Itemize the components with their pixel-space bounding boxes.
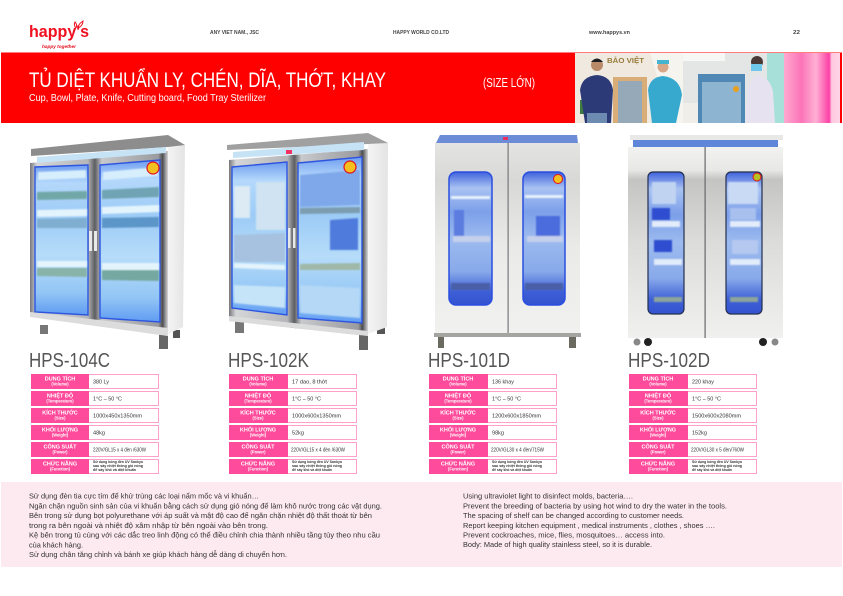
spec table: HPS-102K: (Temperature) xyxy=(244,398,272,404)
spec table: HPS-102D: (Size) xyxy=(653,416,664,420)
spec table: HPS-101D: 220V/GL30 x 4 đèn/715W xyxy=(491,448,544,454)
spec table: HPS-104C: (Temperature) xyxy=(46,398,74,404)
spec table: HPS-102D xyxy=(629,374,756,474)
spec table: HPS-102K: sau sấy nhiệt thông gió nóng xyxy=(292,464,342,468)
English description: Using ultraviolet light to disinfect molds, bacteria…. xyxy=(463,492,633,500)
spec table: HPS-102D: (Temperature) xyxy=(644,398,672,404)
Vietnamese description: trong ra bên ngoài và nhiệt độ xâm nhập từ bên ngoài vào bên trong. xyxy=(29,521,268,530)
spec table: HPS-102D: 152kg xyxy=(692,430,707,436)
spec table: HPS-102D: (Volume) xyxy=(649,382,667,386)
spec table: HPS-102D: sau sấy nhiệt thông gió nóng xyxy=(692,464,742,468)
spec table: HPS-102D: CHỨC NĂNG xyxy=(641,460,675,468)
spec table: HPS-102D: KHỐI LƯỢNG xyxy=(640,426,676,434)
spec table: HPS-102D: (Function) xyxy=(648,466,669,472)
panel: description xyxy=(1,482,842,567)
spec table: HPS-102K: 1000x600x1350mm xyxy=(292,414,341,420)
spec table: HPS-101D: (Function) xyxy=(448,466,469,472)
spec table: HPS-104C: CÔNG SUẤT xyxy=(44,442,77,450)
header: world company name: HAPPY WORLD CO.LTD xyxy=(393,30,449,36)
spec table: HPS-104C: NHIỆT ĐỘ xyxy=(47,392,74,400)
spec table: HPS-101D: 98kg xyxy=(492,430,504,436)
spec table: HPS-102D: KÍCH THƯỚC xyxy=(640,408,676,416)
English description: Body: Made of high quality stainless steel, so it is durable. xyxy=(463,540,652,549)
Vietnamese description: Bên trong sử dụng bọt polyurethane với áp suất và mật độ cao để ngăn chặn nhiệt độ thất thoát từ bên xyxy=(29,511,372,520)
spec table: HPS-101D: (Volume) xyxy=(449,382,467,386)
spec table: HPS-104C: KHỐI LƯỢNG xyxy=(42,426,78,434)
product: HPS-101D cabinet xyxy=(434,135,581,348)
banner subtitle: Cup, Bowl, Plate, Knife, Cutting board, Food Tray Sterilizer xyxy=(29,93,267,104)
spec table: HPS-102D: 220 khay xyxy=(692,380,714,386)
Vietnamese description xyxy=(29,492,382,559)
spec table: HPS-104C: sau sấy nhiệt thông gió nóng xyxy=(93,464,143,468)
spec table: HPS-104C: KÍCH THƯỚC xyxy=(42,408,78,416)
spec table: HPS-102K: Sử dụng bóng đèn UV Sankyo xyxy=(292,460,342,464)
spec table: HPS-101D: KHỐI LƯỢNG xyxy=(440,426,476,434)
logo: happy's xyxy=(29,21,89,50)
spec table: HPS-104C: (Size) xyxy=(55,416,66,420)
spec table: HPS-101D: (Temperature) xyxy=(444,398,472,404)
spec table: HPS-104C: Sử dụng bóng đèn UV Sankyo xyxy=(93,460,143,464)
header: company name: ANY VIET NAM., JSC xyxy=(210,30,259,36)
spec table: HPS-101D: CHỨC NĂNG xyxy=(441,460,475,468)
spec table: HPS-101D: CÔNG SUẤT xyxy=(442,442,475,450)
spec table: HPS-104C xyxy=(31,374,158,474)
photo: delivery to Bao Viet: BẢO VIỆT xyxy=(607,56,645,65)
spec table: HPS-101D: (Power) xyxy=(450,450,466,454)
spec table: HPS-101D: KÍCH THƯỚC xyxy=(440,408,476,416)
spec table: HPS-102K: để sấy khô và diệt khuẩn xyxy=(292,468,332,472)
spec table: HPS-104C: DUNG TÍCH xyxy=(45,374,75,382)
spec table: HPS-101D xyxy=(429,374,556,474)
English description: The spacing of shelf can be changed according to customer needs. xyxy=(463,511,684,520)
spec table: HPS-102K: 52kg xyxy=(292,430,304,436)
spec table: HPS-102D: DUNG TÍCH xyxy=(643,374,673,382)
spec table: HPS-102K: CÔNG SUẤT xyxy=(242,442,275,450)
photo: pink strip xyxy=(784,53,842,123)
product: HPS-102K cabinet xyxy=(227,133,388,350)
model name: HPS-104C: HPS-104C xyxy=(29,350,110,372)
spec table: HPS-101D: (Weight) xyxy=(450,432,467,438)
spec table: HPS-102K xyxy=(229,374,356,474)
spec table: HPS-102D: để sấy khô và diệt khuẩn xyxy=(692,468,732,472)
spec table: HPS-101D: (Size) xyxy=(453,416,464,420)
spec table: HPS-101D: Sử dụng bóng đèn UV Sankyo xyxy=(492,460,542,464)
spec table: HPS-102K: CHỨC NĂNG xyxy=(241,460,275,468)
spec table: HPS-102D: CÔNG SUẤT xyxy=(642,442,675,450)
Vietnamese description: Sử dụng chân tăng chỉnh và bánh xe giúp khách hàng dễ dàng di chuyển hơn. xyxy=(29,550,287,559)
spec table: HPS-102D: 1°C – 50 °C xyxy=(692,396,721,402)
spec table: HPS-102K: (Size) xyxy=(253,416,264,420)
spec table: HPS-101D: DUNG TÍCH xyxy=(443,374,473,382)
spec table: HPS-102K: KHỐI LƯỢNG xyxy=(240,426,276,434)
photo: hospital staff with cabinet xyxy=(683,53,784,123)
Vietnamese description: của khách hàng. xyxy=(29,540,83,550)
spec table: HPS-102D: Sử dụng bóng đèn UV Sankyo xyxy=(692,460,742,464)
spec table: HPS-102K: 220V/GL15 x 4 đèn /630W xyxy=(291,448,345,454)
spec table: HPS-102D: 220V/GL30 x 5 đèn/760W xyxy=(691,448,744,454)
header: website: www.happys.vn xyxy=(588,30,630,36)
spec table: HPS-101D: 1200x600x1850mm xyxy=(492,414,541,420)
logo: happy's: happy's xyxy=(29,22,89,41)
spec table: HPS-102D: NHIỆT ĐỘ xyxy=(645,392,672,400)
model name: HPS-102D: HPS-102D xyxy=(628,350,710,372)
spec table: HPS-102D: (Power) xyxy=(650,450,666,454)
spec table: HPS-104C: 220V/GL15 x 4 đèn /630W xyxy=(93,448,146,454)
spec table: HPS-101D: 136 khay xyxy=(492,380,514,386)
photo: delivery to Bao Viet xyxy=(575,53,683,123)
spec table: HPS-102D: 1500x600x2080mm xyxy=(692,414,741,420)
product: HPS-102D cabinet xyxy=(628,135,783,346)
size label: (SIZE LỚN) xyxy=(483,75,535,90)
spec table: HPS-101D: để sấy khô và diệt khuẩn xyxy=(492,468,532,472)
product: HPS-104C cabinet xyxy=(30,135,185,349)
spec table: HPS-104C: 380 Ly xyxy=(93,380,109,386)
spec table: HPS-104C: để sấy khô và diệt khuẩn xyxy=(93,468,136,472)
Vietnamese description: Kệ bên trong tủ cùng với các dắc treo linh động có thể điều chỉnh chia thành nhiều tầng tùy theo nhu cầu xyxy=(29,530,380,540)
spec table: HPS-104C: 48kg xyxy=(93,430,105,436)
spec table: HPS-102K: 17 dao, 8 thớt xyxy=(292,380,328,386)
spec table: HPS-104C: CHỨC NĂNG xyxy=(43,460,77,468)
spec table: HPS-102K: NHIỆT ĐỘ xyxy=(245,392,272,400)
English description: Report keeping kitchen equipment , medical instruments , clothes , shoes …. xyxy=(463,521,715,530)
spec table: HPS-102K: DUNG TÍCH xyxy=(243,374,273,382)
spec table: HPS-101D: 1°C – 50 °C xyxy=(492,396,521,402)
Vietnamese description: Sử dụng đèn tia cực tím để khử trùng các loại nấm mốc và vi khuẩn… xyxy=(29,492,259,500)
spec table: HPS-104C: 1°C – 50 °C xyxy=(93,396,122,402)
spec table: HPS-101D: sau sấy nhiệt thông gió nóng xyxy=(492,464,542,468)
Vietnamese description: Ngăn chặn nguồn sinh sản của vi khuẩn bằng cách sử dụng gió nóng để làm khô nước trong các vật dụng. xyxy=(29,502,382,510)
spec table: HPS-104C: (Function) xyxy=(50,466,71,472)
spec table: HPS-104C: (Weight) xyxy=(52,432,69,438)
spec table: HPS-104C: (Power) xyxy=(52,450,68,454)
spec table: HPS-102K: KÍCH THƯỚC xyxy=(240,408,276,416)
spec table: HPS-102D: (Weight) xyxy=(650,432,667,438)
spec table: HPS-102K: 1°C – 50 °C xyxy=(292,396,321,402)
spec table: HPS-104C: (Volume) xyxy=(51,382,69,386)
header: page number: 22 xyxy=(793,30,800,36)
spec table: HPS-104C: 1000x450x1350mm xyxy=(93,414,142,420)
spec table: HPS-102K: (Volume) xyxy=(249,382,267,386)
banner title: TỦ DIỆT KHUẨN LY, CHÉN, DĨA, THỚT, KHAY xyxy=(29,68,386,92)
banner photos xyxy=(575,53,842,123)
English description: Prevent the breeding of bacteria by using hot wind to dry the water in the tools. xyxy=(463,502,727,510)
spec table: HPS-102K: (Power) xyxy=(250,450,266,454)
banner xyxy=(1,52,842,123)
logo: happy's: happy together xyxy=(42,44,77,50)
spec table: HPS-102K: (Weight) xyxy=(250,432,267,438)
spec table: HPS-101D: NHIỆT ĐỘ xyxy=(445,392,472,400)
model name: HPS-102K: HPS-102K xyxy=(228,350,310,372)
spec table: HPS-102K: (Function) xyxy=(248,466,269,472)
English description xyxy=(463,492,727,549)
English description: Prevent cockroaches, mice, flies, mosquitoes… access into. xyxy=(463,530,665,540)
model name: HPS-101D: HPS-101D xyxy=(428,350,510,372)
